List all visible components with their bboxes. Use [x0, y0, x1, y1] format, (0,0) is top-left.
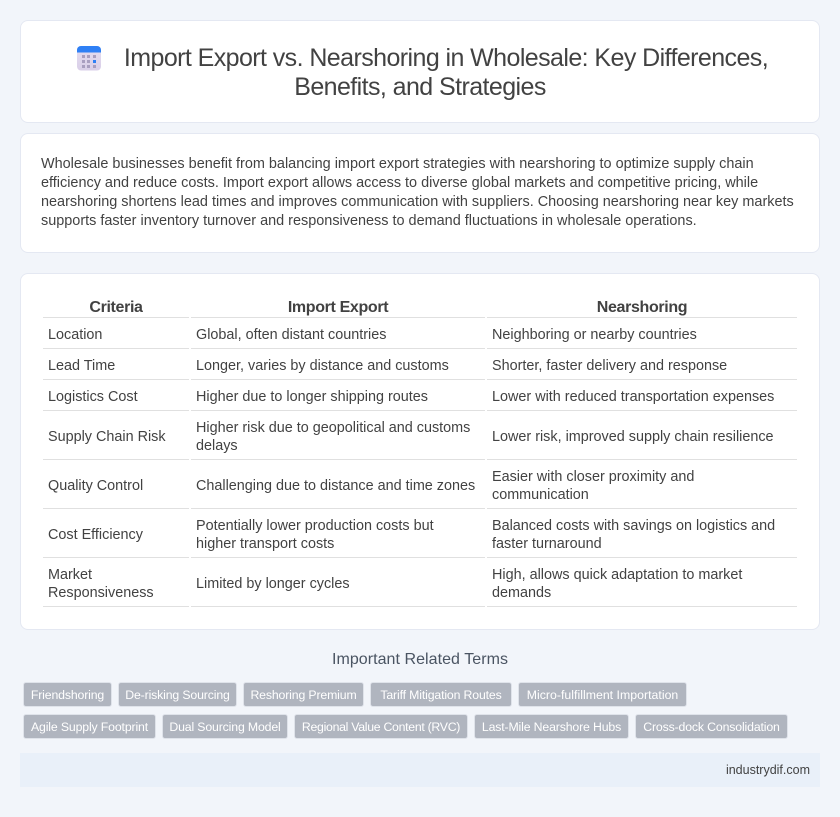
comparison table: Market [48, 567, 92, 583]
tag [635, 714, 788, 739]
comparison table: Import Export [288, 299, 388, 316]
tag: Tariff Mitigation Routes [380, 688, 502, 702]
intro text: nearshoring shortens lead times and improves communication with suppliers. Choosing nearshoring near key markets [41, 194, 794, 210]
comparison table [43, 299, 797, 607]
tag: De-risking Sourcing [125, 688, 230, 702]
title: Import Export vs. Nearshoring in Wholesale: Key Differences, [124, 44, 768, 72]
comparison table: delays [196, 438, 238, 454]
comparison table: Logistics Cost [48, 389, 138, 405]
panel: title card [20, 20, 820, 123]
tag [23, 682, 112, 707]
comparison table: High, allows quick adaptation to market [492, 567, 742, 583]
tag: Agile Supply Footprint [31, 720, 148, 734]
tag [118, 682, 237, 707]
tag: Micro-fulfillment Importation [527, 688, 678, 702]
tag: Cross-dock Consolidation [643, 720, 780, 734]
comparison table: communication [492, 487, 589, 503]
tag [474, 714, 629, 739]
comparison table: Shorter, faster delivery and response [492, 358, 727, 374]
comparison table: Easier with closer proximity and [492, 469, 694, 485]
tag [370, 682, 512, 707]
comparison table: Higher due to longer shipping routes [196, 389, 428, 405]
panel: introduction card [20, 133, 820, 253]
tag [23, 714, 156, 739]
tag: Reshoring Premium [250, 688, 357, 702]
comparison table: Criteria [89, 299, 143, 316]
comparison table: Lead Time [48, 358, 115, 374]
comparison table: Lower with reduced transportation expenses [492, 389, 774, 405]
panel: comparison card [20, 273, 820, 630]
footer source: industrydif.com [726, 763, 810, 777]
comparison table: Balanced costs with savings on logistics and [492, 518, 775, 534]
comparison table: Lower risk, improved supply chain resilience [492, 429, 774, 445]
tag [162, 714, 288, 739]
tag: Last-Mile Nearshore Hubs [482, 720, 621, 734]
comparison table: Supply Chain Risk [48, 429, 166, 445]
tag: Dual Sourcing Model [169, 720, 281, 734]
comparison table: faster turnaround [492, 536, 602, 552]
title [124, 44, 768, 101]
comparison table: Longer, varies by distance and customs [196, 358, 449, 374]
tag: Regional Value Content (RVC) [302, 720, 460, 734]
tag [243, 682, 364, 707]
comparison table: Global, often distant countries [196, 327, 386, 343]
comparison table: Location [48, 327, 102, 343]
comparison table: Quality Control [48, 478, 143, 494]
footer bar [20, 753, 820, 787]
comparison table: higher transport costs [196, 536, 334, 552]
intro text: efficiency and reduce costs. Import export allows access to diverse global markets and competitive pricing, while [41, 175, 758, 191]
title: Benefits, and Strategies [294, 73, 546, 101]
tag: Friendshoring [31, 688, 104, 702]
tag [518, 682, 687, 707]
comparison table: demands [492, 585, 551, 601]
tag [294, 714, 468, 739]
comparison table: Neighboring or nearby countries [492, 327, 697, 343]
heading: related terms: Important Related Terms [332, 651, 508, 668]
intro text: supports faster inventory turnover and responsiveness to demand fluctuations in wholesale operations. [41, 213, 697, 229]
comparison table: Potentially lower production costs but [196, 518, 434, 534]
comparison table: Challenging due to distance and time zones [196, 478, 475, 494]
comparison table: Limited by longer cycles [196, 576, 350, 592]
comparison table: Responsiveness [48, 585, 154, 601]
comparison table: Cost Efficiency [48, 527, 143, 543]
icon: calendar [77, 46, 101, 70]
comparison table: Higher risk due to geopolitical and customs [196, 420, 470, 436]
intro text [41, 156, 794, 229]
comparison table: Nearshoring [597, 299, 687, 316]
intro text: Wholesale businesses benefit from balancing import export strategies with nearshoring to optimize supply chain [41, 156, 754, 172]
